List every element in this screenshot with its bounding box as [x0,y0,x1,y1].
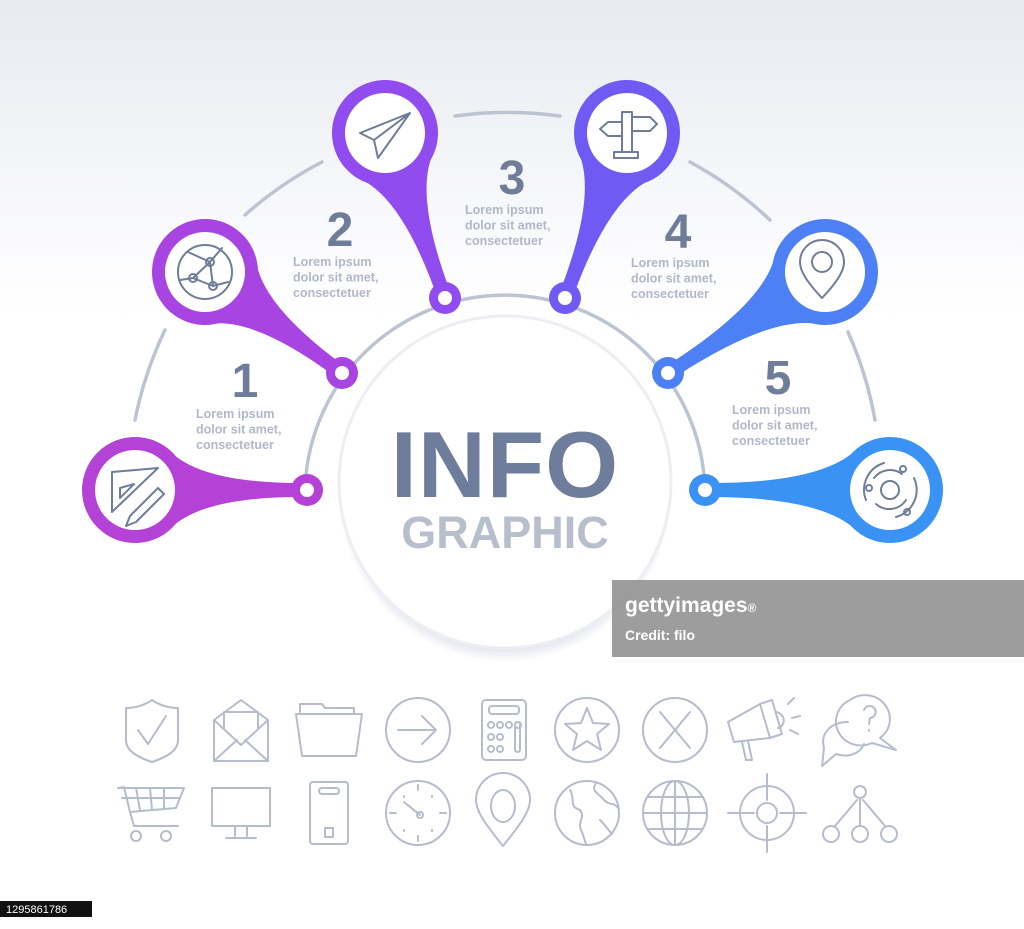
step 2: 2 [327,204,353,257]
icon: earth [555,781,619,845]
step 3 [465,152,550,248]
icon: hierarchy [823,786,897,842]
icon: signpost [600,112,657,158]
step 5: dolor sit amet, [732,418,817,432]
icon: ruler pencil [112,468,164,526]
icon: map pin [476,773,530,846]
step 2: Lorem ipsum [293,255,372,269]
icon: shield [126,700,178,762]
icon: envelope [214,700,268,761]
title INFO: INFO [391,412,619,517]
icon: globe grid [643,781,707,845]
outer arc segments [135,112,875,420]
subtitle GRAPHIC: GRAPHIC [401,507,609,558]
watermark panel: Credit: filo [625,627,695,643]
pins [82,65,943,543]
icon: speech bubbles [822,695,896,766]
pin 1 [82,437,323,543]
icon: orbit [864,463,917,517]
icon: clock [386,781,450,845]
step 2: dolor sit amet, [293,270,378,284]
step 4: consectetuer [631,287,709,301]
step 5 [732,352,817,448]
pin 3 [317,65,491,314]
step 3: Lorem ipsum [465,203,544,217]
icon: megaphone [728,698,800,760]
step 1: 1 [232,355,258,408]
step 1 [196,355,281,452]
pin 5 [645,199,898,414]
id label [0,901,92,917]
icon: star circle [555,698,619,762]
step 1: Lorem ipsum [196,407,274,421]
step 5: 5 [765,352,791,405]
watermark panel: gettyimages® [625,594,757,617]
step 2 [293,204,378,300]
step 4: Lorem ipsum [631,256,710,270]
icon: target [728,774,806,852]
icon: cart [118,787,184,841]
step 4 [631,206,716,301]
step 1: dolor sit amet, [196,422,281,436]
step 4: dolor sit amet, [631,272,716,286]
step 2: consectetuer [293,286,371,300]
step 4: 4 [665,206,692,259]
id label: 1295861786 [6,904,67,916]
icon: folder [296,704,362,756]
step 3: consectetuer [465,234,543,248]
icon: arrow circle [386,698,450,762]
pin 4 [519,65,695,314]
watermark panel [612,580,1024,657]
pin icons [112,112,917,526]
icon: calculator [482,700,526,760]
icon: monitor [212,788,270,838]
icon set rows [118,695,897,852]
icon: paper plane [360,113,410,158]
inner arc [305,295,705,495]
icon: network globe [178,245,232,299]
pin 6 [689,437,943,543]
center circle [339,316,671,662]
step 5: Lorem ipsum [732,403,810,417]
step 3: dolor sit amet, [465,218,550,232]
pin 2 [131,198,369,413]
step numbers and text [196,152,817,452]
step 5: consectetuer [732,434,810,448]
icon: x circle [643,698,707,762]
step 3: 3 [499,152,525,205]
icon: location pin [800,240,844,298]
icon: phone [310,782,348,844]
step 1: consectetuer [196,438,274,452]
